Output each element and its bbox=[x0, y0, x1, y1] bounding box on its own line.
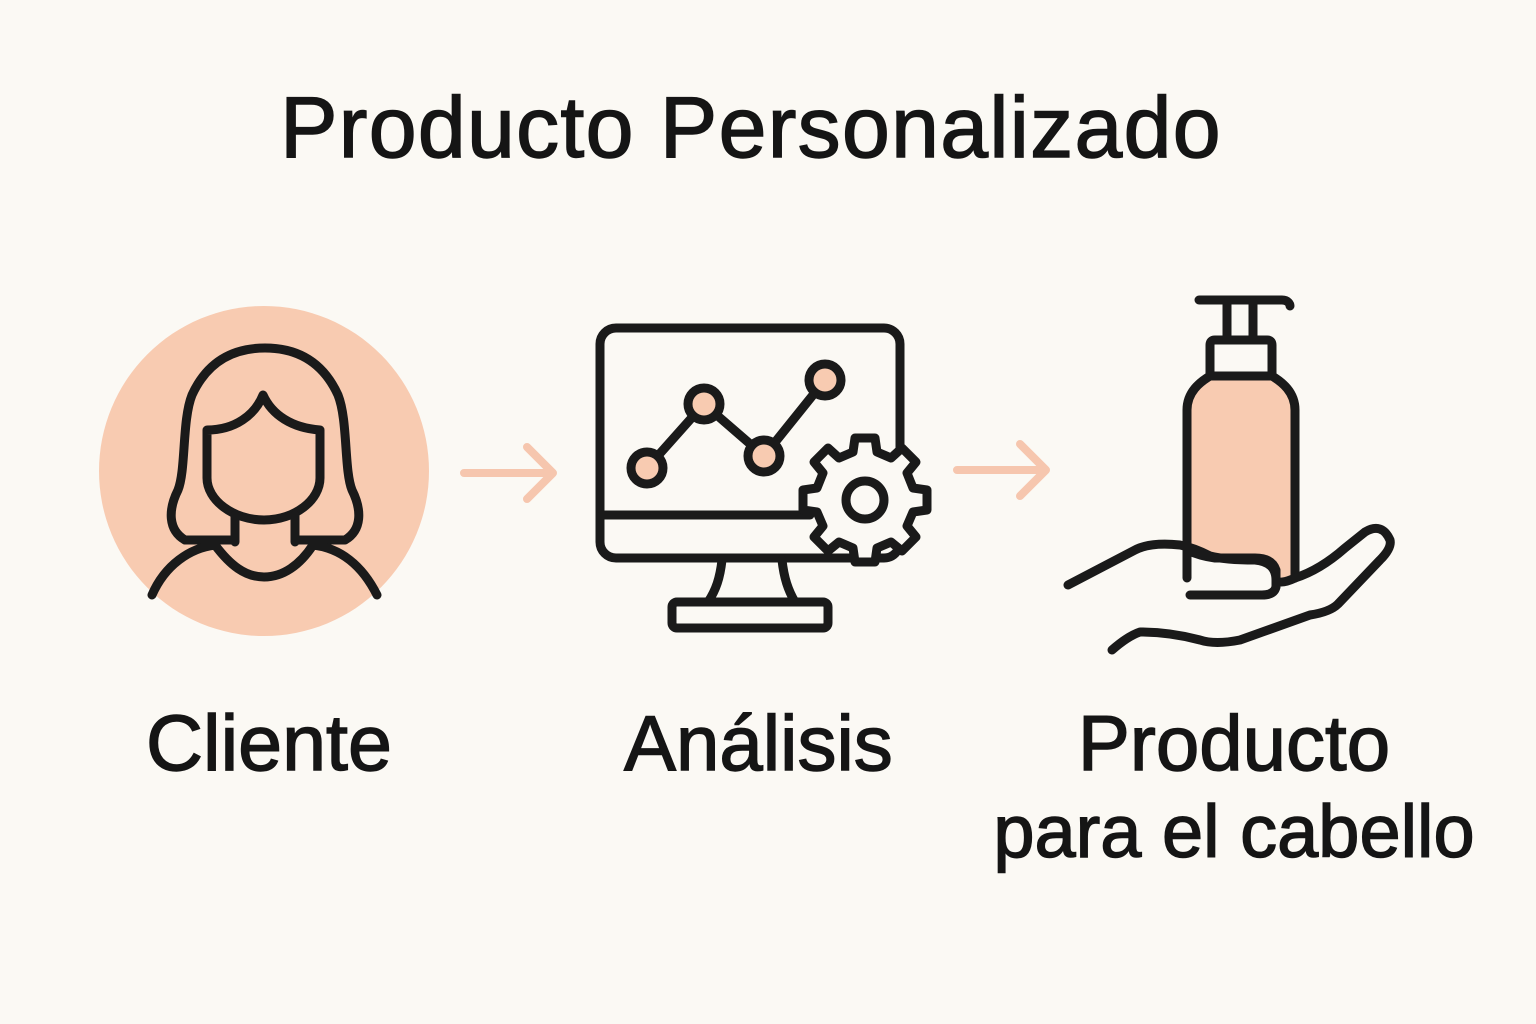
title: Producto Personalizado bbox=[280, 80, 1222, 176]
icon: bottle in hand bbox=[1068, 300, 1390, 650]
arrow 2 bbox=[957, 444, 1046, 496]
label: Análisis: Análisis bbox=[624, 699, 893, 787]
icon: gear bbox=[803, 438, 927, 562]
label: Producto para el cabello: Producto bbox=[1078, 699, 1390, 787]
label: Producto para el cabello bbox=[993, 699, 1475, 874]
icon: monitor analysis bbox=[600, 328, 927, 628]
icon: client woman bbox=[99, 306, 429, 636]
label: Producto para el cabello: para el cabello bbox=[993, 790, 1475, 873]
label: Cliente: Cliente bbox=[146, 698, 392, 787]
arrow 1 bbox=[464, 447, 553, 499]
